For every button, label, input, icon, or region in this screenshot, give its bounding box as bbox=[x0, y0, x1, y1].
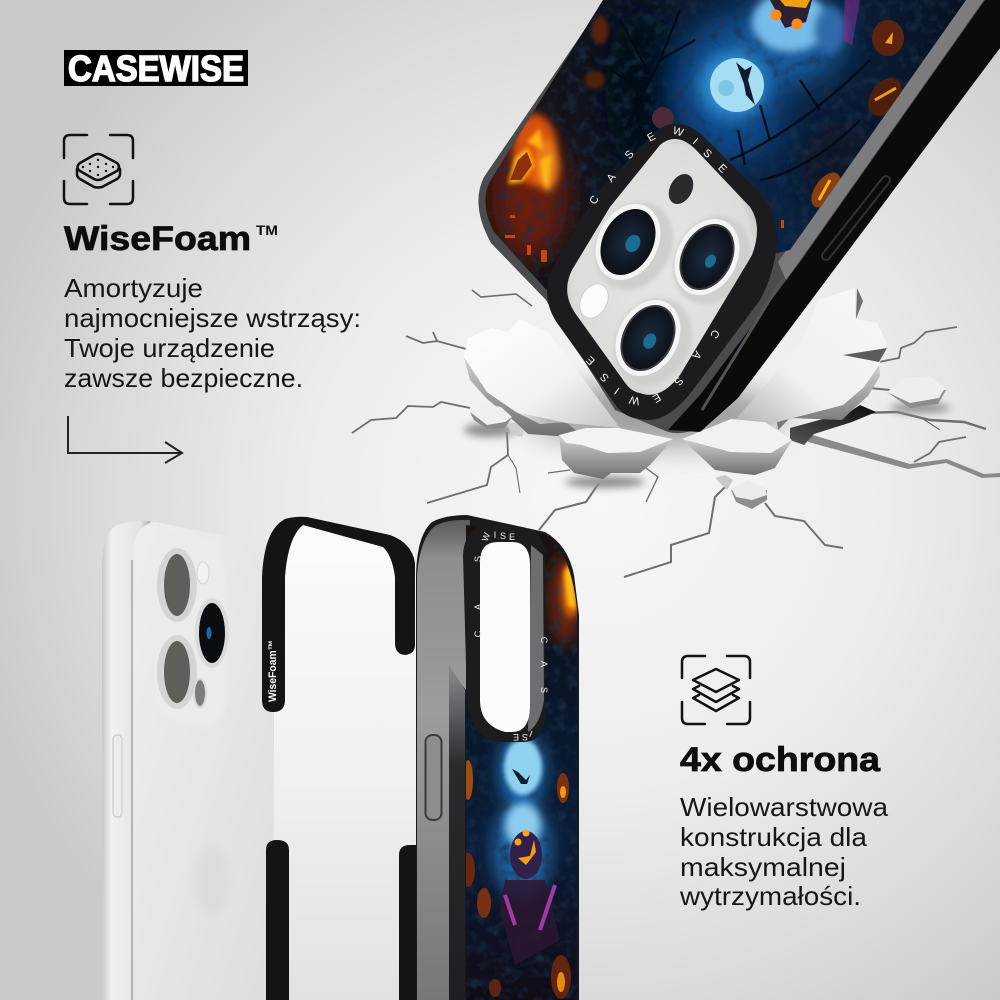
cracked wall bbox=[352, 288, 1000, 577]
ring lettering lower: E bbox=[584, 353, 598, 367]
description: WiseFoam: Twoje urządzenie bbox=[64, 333, 275, 363]
ring lettering upper: E bbox=[645, 130, 658, 144]
ring lettering bottom bbox=[513, 729, 534, 742]
ring lettering lower bbox=[584, 327, 722, 407]
crack lines bbox=[352, 290, 986, 577]
black side edge bbox=[668, 0, 1000, 432]
description: 4x ochrona: maksymalnej bbox=[680, 852, 846, 882]
ring lettering lower: I bbox=[613, 385, 622, 396]
lower left white phone bbox=[102, 521, 274, 1000]
side button bbox=[113, 735, 122, 817]
lens 3 bbox=[603, 289, 693, 387]
lidar bbox=[664, 170, 698, 208]
small rocks bottom bbox=[715, 475, 767, 509]
monster bbox=[505, 803, 541, 847]
camera plateau bbox=[150, 532, 228, 728]
pumpkins bbox=[872, 20, 904, 56]
pumpkins bbox=[557, 773, 569, 803]
fire bbox=[562, 562, 580, 618]
metallic side strip bbox=[778, 0, 984, 280]
description: 4x ochrona: konstrukcja dla bbox=[680, 822, 868, 852]
lens 2 bbox=[662, 208, 752, 306]
ring lettering upper: C bbox=[587, 194, 602, 207]
fire pumpkin bbox=[513, 114, 559, 191]
white phone flash bbox=[197, 562, 209, 584]
ring lettering upper: S bbox=[700, 147, 714, 161]
ring lettering left: S bbox=[473, 556, 483, 562]
soft shadow around impact bbox=[525, 383, 785, 447]
ring lettering lower: A bbox=[689, 348, 703, 362]
black foam bar right bbox=[399, 845, 418, 1000]
center slab right bbox=[682, 439, 792, 475]
ring lettering right: C bbox=[539, 637, 549, 644]
ring lettering upper bbox=[587, 125, 729, 207]
moon bbox=[504, 739, 542, 795]
frame seam bbox=[131, 560, 133, 1000]
ring lettering right: S bbox=[539, 687, 549, 693]
camera island ring bbox=[547, 124, 777, 420]
ember specks bbox=[505, 215, 784, 262]
arrow bbox=[68, 416, 182, 463]
ring lettering lower: C bbox=[707, 327, 722, 340]
ghost pumpkin monster bbox=[752, 0, 846, 54]
ring lettering left bbox=[473, 556, 483, 637]
camera island inner bbox=[567, 139, 757, 395]
bat bbox=[512, 769, 530, 784]
flash bbox=[574, 279, 614, 323]
description: WiseFoam: zawsze bezpieczne. bbox=[64, 363, 303, 393]
case body bbox=[478, 0, 1000, 433]
ring lettering left: A bbox=[473, 604, 483, 610]
lens 1 bbox=[583, 193, 673, 291]
ring lettering right: A bbox=[539, 661, 549, 667]
feature block: WiseFoam bbox=[64, 135, 361, 463]
ring lettering upper: E bbox=[715, 162, 729, 176]
phone frame bbox=[102, 521, 150, 1000]
rock slabs in front of phone bbox=[559, 419, 792, 479]
right slab side bbox=[777, 365, 880, 430]
ring lettering top: I bbox=[494, 530, 496, 540]
icon: foam pad in viewfinder brackets bbox=[64, 135, 133, 204]
WiseFoam black strip bbox=[262, 517, 415, 712]
ring lettering top: W bbox=[480, 531, 492, 543]
left slab top bbox=[464, 319, 620, 428]
side button bbox=[826, 180, 886, 256]
ring lettering upper: A bbox=[605, 171, 619, 185]
ring lettering upper: S bbox=[623, 148, 637, 162]
side button bbox=[426, 735, 442, 820]
ring lettering lower: S bbox=[598, 370, 612, 384]
case artwork bbox=[486, 0, 966, 290]
ring lettering right bbox=[539, 637, 549, 693]
right slab spike bbox=[856, 288, 863, 319]
ring lettering top: S bbox=[500, 531, 506, 541]
description: 4x ochrona bbox=[679, 792, 889, 911]
white phone sensor bbox=[194, 679, 206, 707]
heading: 4x ochrona: 4x ochrona bbox=[680, 741, 881, 779]
painted texture overlay bbox=[466, 525, 578, 1000]
phone back bbox=[133, 522, 274, 1000]
black foam bar left bbox=[266, 840, 289, 1000]
white phone lens middle bbox=[195, 598, 229, 668]
ring lettering bottom: S bbox=[522, 732, 528, 742]
icon: stacked layers in viewfinder brackets bbox=[682, 656, 750, 724]
case artwork bbox=[461, 525, 581, 1000]
ring lettering lower: W bbox=[628, 393, 641, 407]
white phone lens top bbox=[157, 548, 197, 622]
upper phone in halloween case bbox=[470, 0, 1000, 433]
dark triangle on right slab bbox=[843, 348, 887, 362]
description: WiseFoam bbox=[64, 273, 361, 393]
painted texture overlay bbox=[487, 0, 962, 284]
description: WiseFoam: Amortyzuje bbox=[64, 273, 203, 303]
ring lettering lower: E bbox=[650, 391, 663, 405]
description: 4x ochrona: wytrzymałości. bbox=[679, 881, 861, 911]
ring lettering bottom: I bbox=[528, 729, 534, 739]
lens bumps bbox=[595, 202, 753, 386]
trademark sign: TM bbox=[256, 222, 278, 238]
ring lettering bottom: E bbox=[513, 732, 519, 742]
small rock left bbox=[470, 404, 524, 437]
ring lettering upper: W bbox=[671, 125, 685, 140]
dark hole under right slab bbox=[790, 405, 876, 445]
left slab side bbox=[464, 357, 578, 436]
ring lettering upper: I bbox=[690, 136, 700, 147]
shadow under rocks bbox=[464, 403, 950, 488]
ring lettering lower: S bbox=[671, 374, 685, 388]
description: 4x ochrona: Wielowarstwowa bbox=[680, 792, 889, 822]
highlight line lower edge bbox=[702, 278, 783, 410]
camera ring bbox=[463, 524, 545, 742]
brand logo: CASEWISE: CASEWISE bbox=[68, 48, 244, 89]
feature block: 4x ochrona bbox=[679, 656, 889, 911]
ring lettering left: C bbox=[473, 630, 483, 637]
ring lettering top: E bbox=[509, 532, 515, 542]
white phone lens bottom bbox=[157, 635, 197, 709]
case shell bbox=[416, 515, 579, 1000]
clear case back panel bbox=[274, 525, 418, 1000]
ring inner metallic right bbox=[528, 545, 544, 732]
bat bbox=[736, 62, 755, 105]
small rock right bbox=[887, 376, 946, 408]
dark tree branches bbox=[610, 10, 870, 180]
moon bbox=[699, 51, 767, 119]
description: WiseFoam: najmocniejsze wstrząsy: bbox=[64, 303, 361, 333]
ring lettering top bbox=[480, 530, 515, 543]
apple logo ghost bbox=[194, 844, 230, 916]
large wedge crack right bbox=[806, 433, 1000, 478]
center slab left bbox=[559, 435, 673, 479]
right slab top bbox=[735, 288, 887, 422]
heading: WiseFoam: WiseFoam bbox=[64, 220, 251, 258]
metallic side bbox=[417, 520, 470, 1000]
lower right phone case bbox=[416, 515, 581, 1000]
dark mid side bbox=[449, 665, 465, 1000]
strip label: WiseFoam™ bbox=[267, 640, 279, 702]
camera window bbox=[480, 542, 530, 732]
